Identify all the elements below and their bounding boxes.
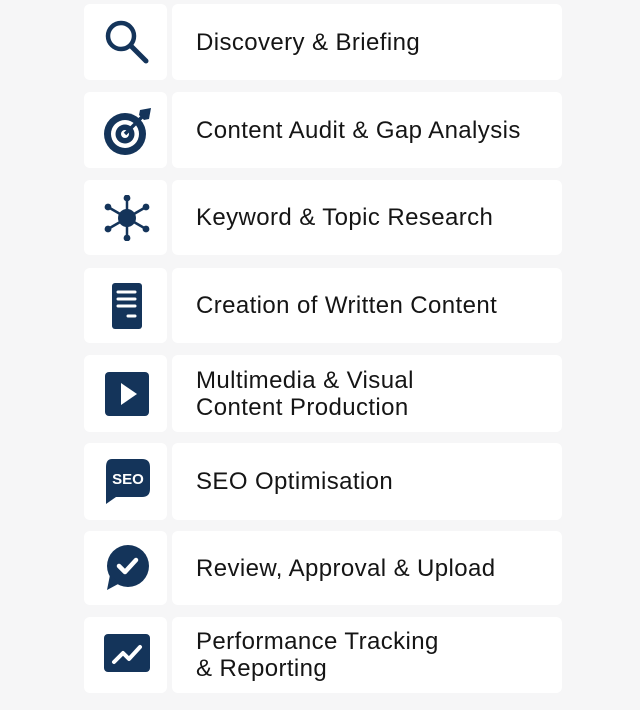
- text: Performance Tracking: [196, 628, 439, 655]
- text: [172, 4, 562, 80]
- text: & Reporting: [196, 655, 327, 682]
- text: [172, 92, 562, 168]
- text: Content Audit & Gap Analysis: [196, 116, 521, 144]
- icon: document: [84, 268, 167, 343]
- row: SEO: [84, 443, 562, 520]
- text: Review, Approval & Upload: [196, 554, 496, 582]
- icon: check bubble: [84, 531, 167, 605]
- text: [172, 617, 562, 693]
- icon: play: [84, 355, 167, 432]
- row: Creation: [84, 268, 562, 343]
- text: Creation of Written Content: [196, 292, 497, 319]
- row: Multimedia: [84, 355, 562, 432]
- text: [172, 180, 562, 255]
- icon: network: [84, 180, 167, 255]
- text: SEO Optimisation: [196, 468, 393, 495]
- text: Discovery & Briefing: [196, 28, 420, 56]
- row: Review: [84, 531, 562, 605]
- icon: chart: [84, 617, 167, 693]
- text: [172, 443, 562, 520]
- icon: SEO bubble: [84, 443, 167, 520]
- row: Discovery & Briefing: [84, 4, 562, 80]
- text: Keyword & Topic Research: [196, 204, 493, 231]
- row: Keyword: [84, 180, 562, 255]
- text: Multimedia & Visual: [196, 366, 414, 394]
- text: [172, 531, 562, 605]
- row: Performance: [84, 617, 562, 693]
- icon: magnifier: [84, 4, 167, 80]
- icon: SEO bubble: SEO: [112, 470, 144, 488]
- row: Content Audit: [84, 92, 562, 168]
- text: [172, 268, 562, 343]
- text: [172, 355, 562, 432]
- icon: target: [84, 92, 167, 168]
- text: Content Production: [196, 394, 409, 420]
